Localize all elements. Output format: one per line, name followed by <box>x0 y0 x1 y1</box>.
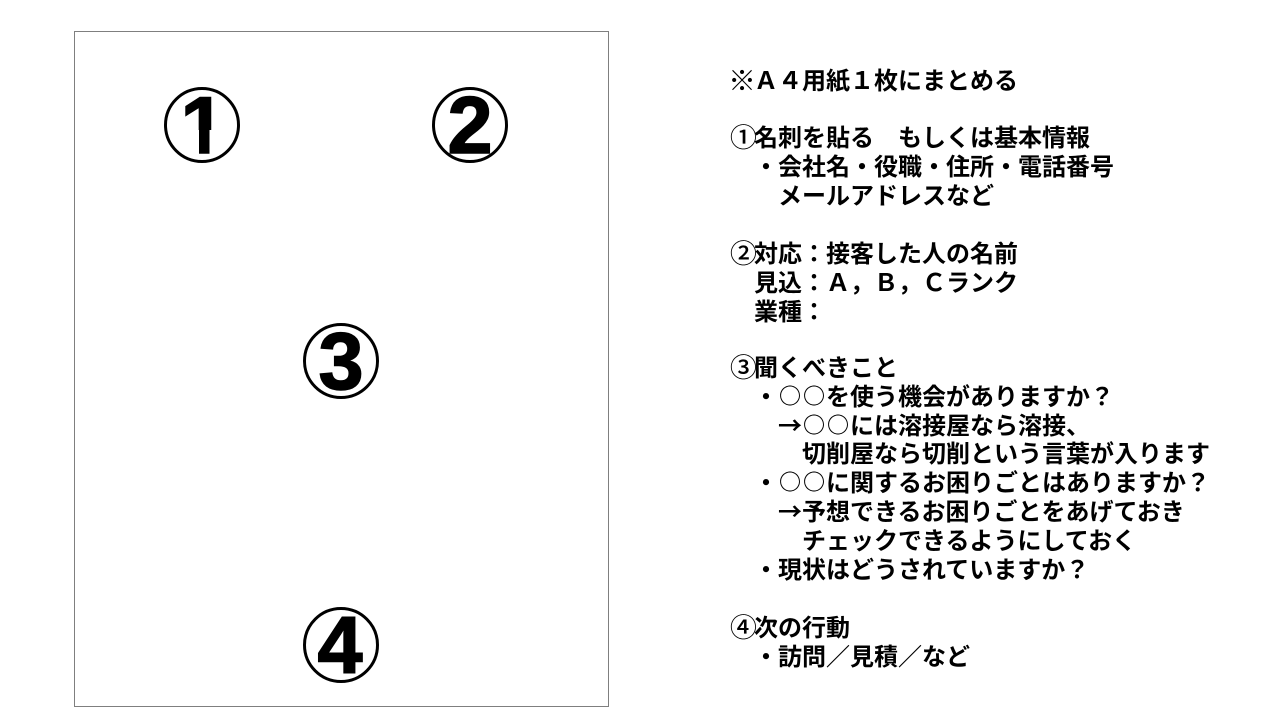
text block: item 4 next action: ・訪問／見積／など <box>754 637 970 672</box>
text block: item 3 questions to ask: ○ <box>827 407 849 439</box>
sheet position markers <box>164 87 508 683</box>
text block: item 3 questions to ask: ・現状はどうされていますか？ <box>754 550 1089 585</box>
marker 1: business card area <box>164 87 240 163</box>
text block: item 3 questions to ask: ③ <box>730 346 757 385</box>
text block: item 4 next action: 次の行動 <box>754 608 850 643</box>
marker 3: questions area <box>304 317 378 407</box>
text block: item 2 response details: 業種： <box>754 292 826 327</box>
text block: item 3 questions to ask: ・ に関するお困りごとはありますか？ <box>754 463 1210 498</box>
heading: ※ <box>728 58 756 98</box>
text block: item 1 business card <box>730 116 1114 211</box>
marker 2: response details area <box>434 81 506 171</box>
marker 4: next action area: 4 <box>317 601 363 691</box>
heading: Ａ４用紙１枚にまとめる <box>754 61 1018 96</box>
marker 2: response details area: 2 <box>447 81 493 171</box>
text block: item 2 response details: ② <box>730 232 757 271</box>
text block: item 3 questions to ask: 聞くべきこと <box>754 348 898 383</box>
text block: item 3 questions to ask: チェックできるようにしておく <box>802 521 1136 556</box>
marker 1: business card area: 1 <box>180 81 226 171</box>
marker 3: questions area: 3 <box>318 317 364 407</box>
text block: item 4 next action <box>730 606 970 672</box>
text block: item 3 questions to ask: 切削屋なら切削という言葉が入ります <box>802 434 1210 469</box>
text block: item 3 questions to ask: ○ <box>803 378 825 410</box>
text block: item 1 business card: ① <box>730 116 757 155</box>
text block: item 1 business card: メールアドレスなど <box>778 176 994 211</box>
text block: item 3 questions to ask: ○ <box>779 465 801 497</box>
text block: item 3 questions to ask: ○ <box>803 465 825 497</box>
text block: item 2 response details <box>730 232 1018 327</box>
text block: item 2 response details: 対応：接客した人の名前 <box>754 234 1018 269</box>
text block: item 3 questions to ask: ○ <box>803 407 825 439</box>
panel: A4 sheet outline <box>74 31 609 707</box>
text block: item 3 questions to ask: → には溶接屋なら溶接、 <box>778 406 1090 441</box>
text block: item 3 questions to ask: ・ を使う機会がありますか？ <box>754 377 1114 412</box>
text block: item 2 response details: 見込：Ａ，Ｂ，Ｃランク <box>754 263 1018 298</box>
text block: item 1 business card: 名刺を貼る もしくは基本情報 <box>754 118 1090 153</box>
text block: item 4 next action: ④ <box>730 606 757 645</box>
text block: item 3 questions to ask: ○ <box>779 378 801 410</box>
marker 4: next action area <box>304 601 378 691</box>
text block: item 3 questions to ask: →予想できるお困りごとをあげておき <box>778 492 1185 527</box>
text block: item 3 questions to ask <box>730 346 1210 585</box>
text block: item 1 business card: ・会社名・役職・住所・電話番号 <box>754 147 1114 182</box>
